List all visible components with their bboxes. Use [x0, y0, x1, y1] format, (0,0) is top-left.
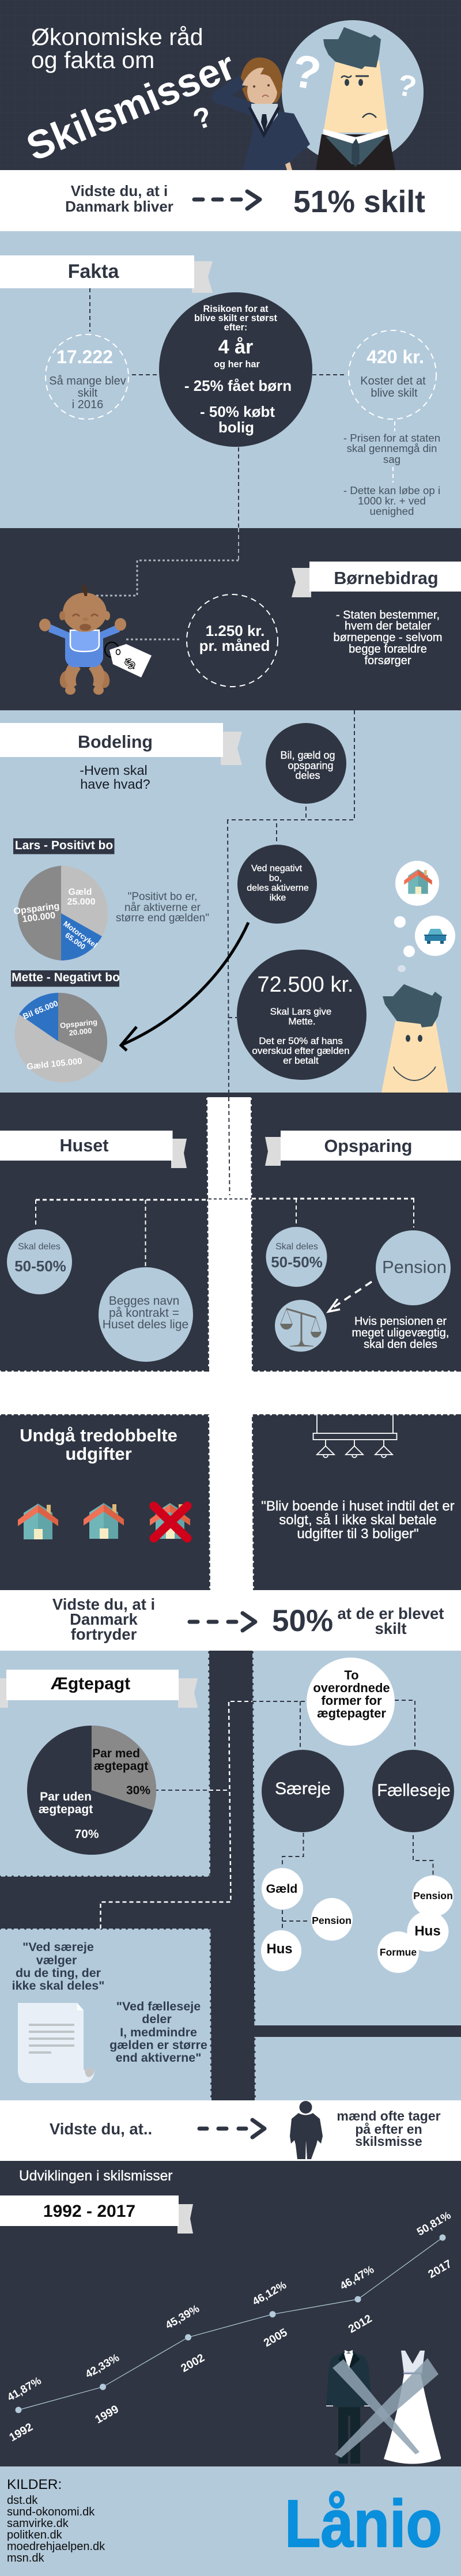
- quote: Særeje: ikke skal deles": [12, 1979, 104, 1993]
- text: price notes: uenighed: [370, 505, 414, 517]
- stat: 420 kr.: [349, 330, 436, 419]
- circle: Pension: Pension: [382, 1257, 447, 1277]
- central circle: risk: Risikoen for at: [203, 304, 269, 314]
- quote: Fælleseje: [109, 1999, 207, 2065]
- circle: Hus right: [407, 1911, 448, 1952]
- circle: 72.500 kr.: er betalt: [283, 1055, 319, 1066]
- panel: Ægtepagt: [0, 1651, 461, 2100]
- quote: Fælleseje: "Ved fælleseje: [116, 1999, 201, 2013]
- icon: question marks: ?: [288, 44, 325, 100]
- line chart: 42,33%: [84, 2352, 122, 2381]
- circle: Skal deles savings: [266, 1227, 327, 1287]
- arrow: dashed white: [328, 1282, 372, 1312]
- line chart: 2002: [179, 2351, 207, 2375]
- pie chart: Lars: 25.000: [67, 897, 96, 907]
- quote: Særeje: du de ting, der: [16, 1966, 101, 1980]
- pie chart: Mette: Opsparing: [59, 1018, 98, 1030]
- source list: politken.dk: [7, 2529, 63, 2541]
- line chart: 46,12%: [251, 2279, 289, 2308]
- circle: Gæld: [262, 1868, 303, 1910]
- text: who pays: hvem der betaler: [345, 620, 431, 632]
- text: subtitle: [80, 763, 150, 792]
- text: price notes: [343, 432, 440, 517]
- circle: 72.500 kr.: 72.500 kr.: [258, 973, 353, 997]
- line chart: [5, 2209, 454, 2444]
- central circle: risk: - 25% fået børn: [184, 377, 292, 394]
- circle: Fælleseje: [372, 1750, 454, 1832]
- central circle: risk: 4 år: [218, 336, 253, 358]
- icon: house: [84, 1503, 124, 1539]
- icon: question marks: ?: [395, 68, 420, 104]
- text: positive estate quote: når aktiverne er: [124, 902, 201, 914]
- circle: Hus: Hus: [267, 1941, 292, 1957]
- heading: Fakta: Fakta: [68, 261, 119, 283]
- pie chart: Ægtepagt: Par uden: [40, 1790, 92, 1803]
- stat: 420 kr.: 420 kr.: [366, 347, 424, 367]
- circle: Skal deles house: [7, 1229, 72, 1294]
- circle: both names on contract: på kontrakt =: [109, 1306, 179, 1320]
- pie chart: Lars: Opsparing: [13, 901, 60, 917]
- banner: 1992 - 2017: 1992 - 2017: [43, 2202, 135, 2221]
- panel: chart trend: [0, 2168, 454, 2464]
- heading: [20, 1425, 177, 1464]
- text: price notes: skal gennemgå din: [347, 442, 437, 454]
- circle: 72.500 kr.: Skal Lars give: [270, 1006, 331, 1017]
- heading: Undgå tredobbelte: [20, 1425, 177, 1445]
- callout: 51% skilt: 51% skilt: [293, 185, 425, 219]
- callout: men gain weight: Vidste du, at..: [50, 2120, 152, 2138]
- circle: 72.500 kr.: Det er 50% af hans: [259, 1035, 343, 1046]
- callout: 51% skilt: Vidste du, at i: [71, 182, 168, 199]
- circle: Gæld: Gæld: [266, 1882, 297, 1896]
- circle: both names on contract: [99, 1267, 193, 1362]
- heading: Ægtepagt: [0, 1670, 198, 1708]
- circle: To overordnede: former for: [321, 1693, 382, 1708]
- icon: house: [18, 1504, 58, 1539]
- line chart: 45,39%: [164, 2303, 202, 2332]
- stat: 1.250 kr.: pr. måned: [199, 637, 270, 654]
- text: pension note: [352, 1315, 449, 1351]
- stat: 1.250 kr.: [187, 594, 278, 687]
- panel: Fakta: [0, 255, 440, 528]
- heading: Ægtepagt: Ægtepagt: [51, 1674, 130, 1693]
- title: Skilsmisser: [20, 43, 241, 170]
- heading: udgifter: [65, 1444, 132, 1464]
- circle: Hus: [261, 1930, 301, 1971]
- banner: 1992 - 2017: [0, 2195, 193, 2234]
- line chart: 2005: [262, 2326, 290, 2349]
- heading: Børnebidrag: [292, 562, 461, 597]
- line chart: 1999: [93, 2402, 121, 2426]
- source list: sund-okonomi.dk: [7, 2506, 95, 2518]
- pie chart: Lars: 65.000: [63, 931, 87, 951]
- label: Mette: Mette - Negativt bo: [12, 971, 120, 984]
- icon: happy man: [381, 984, 448, 1093]
- pie chart: Ægtepagt: [27, 1726, 156, 1855]
- circle: both names on contract: Huset deles lige: [103, 1318, 188, 1331]
- callout: 50% regret: Vidste du, at i: [52, 1595, 155, 1613]
- text: who pays: [334, 609, 442, 667]
- line chart: 2012: [346, 2312, 374, 2336]
- callout: men gain weight: [50, 2101, 441, 2159]
- panel: dark split panels top: [0, 1093, 461, 1372]
- heading: Huset: [0, 1131, 187, 1168]
- central circle: risk: [159, 292, 312, 447]
- icon: suit and dress crossed out: [326, 2350, 441, 2464]
- central circle: risk: blive skilt er størst: [194, 313, 278, 323]
- arrow: [199, 2120, 264, 2137]
- quote: Særeje: [12, 1940, 104, 1993]
- text: pension note: meget uligevægtig,: [352, 1327, 449, 1339]
- line chart: 41,87%: [5, 2375, 44, 2404]
- panel: Børnebidrag: [39, 528, 461, 695]
- pie chart: Ægtepagt: Par med: [92, 1747, 140, 1760]
- heading: KILDER: KILDER:: [7, 2477, 62, 2492]
- pie chart: Mette: Bil 65.000: [21, 999, 59, 1021]
- icon: question marks: ?: [189, 100, 216, 136]
- text: positive estate quote: "Positivt bo er,: [128, 891, 197, 903]
- quote: Fælleseje: gælden er større: [109, 2038, 207, 2052]
- circle: Formue: [377, 1931, 419, 1973]
- pie chart: Mette: [15, 993, 107, 1083]
- quote: [261, 1498, 455, 1542]
- pie chart: Ægtepagt: ægtepagt: [94, 1760, 148, 1773]
- text: who pays: børnepenge - selvom: [334, 631, 442, 644]
- callout: 50% regret: at de er blevet: [338, 1605, 444, 1622]
- heading: Opsparing: Opsparing: [324, 1136, 412, 1156]
- circle: Særeje: Særeje: [275, 1779, 331, 1798]
- line chart: 46,47%: [338, 2264, 376, 2293]
- pie chart: Ægtepagt: 70%: [74, 1828, 99, 1841]
- arrow: [194, 191, 260, 209]
- source list: samvirke.dk: [7, 2517, 69, 2530]
- circle: To overordnede: [307, 1658, 395, 1746]
- circle: shared items: deles: [295, 770, 320, 781]
- circle: negative estate: bo,: [269, 873, 282, 883]
- icon: baby with price tag: [39, 583, 152, 695]
- pie chart: Ægtepagt: 30%: [126, 1784, 150, 1797]
- callout: 50% regret: 50%: [272, 1604, 333, 1638]
- pie chart: Lars: Gæld: [69, 887, 92, 897]
- panel: Bliv boende: [252, 1414, 461, 1590]
- icon: thought bubbles: [394, 861, 455, 972]
- circle: Skal deles savings: 50-50%: [271, 1253, 323, 1271]
- icon: question marks: [189, 44, 420, 136]
- circle: shared items: Bil, gæld og: [280, 750, 335, 761]
- icon: worried woman: [218, 58, 310, 170]
- arrow: [190, 1613, 255, 1630]
- panel: Undgå tredobbelte udgifter: [0, 1414, 210, 1590]
- text: subtitle: have hvad?: [80, 777, 150, 792]
- heading: Børnebidrag: Børnebidrag: [334, 568, 439, 588]
- label: Lars: Lars - Positivt bo: [15, 839, 113, 852]
- text: who pays: forsørger: [364, 654, 411, 667]
- central circle: risk: efter:: [224, 322, 247, 333]
- circle: To overordnede: overordnede: [313, 1681, 390, 1695]
- text: price notes: - Prisen for at staten: [343, 432, 440, 444]
- callout: 50% regret: skilt: [375, 1620, 407, 1637]
- quote: Fælleseje: I, medmindre: [120, 2025, 197, 2039]
- circle: Særeje: [262, 1750, 344, 1832]
- icon: ceiling lamp: [313, 1414, 396, 1458]
- quote: Særeje: "Ved særeje: [22, 1940, 94, 1954]
- icon: baby with price tag: $: [121, 654, 139, 673]
- source list: [7, 2494, 105, 2564]
- icon: scales: [275, 1300, 327, 1351]
- circle: negative estate: ikke: [270, 893, 286, 903]
- stat: 17.222: i 2016: [72, 398, 103, 411]
- quote: Fælleseje: end aktiverne": [116, 2051, 201, 2065]
- circle: negative estate: [237, 845, 317, 924]
- circle: Pension: [311, 1898, 353, 1941]
- line chart: 50,81%: [415, 2209, 453, 2239]
- callout: 50% regret: fortryder: [71, 1625, 137, 1643]
- arrow: curved black: [121, 922, 248, 1050]
- circle: negative estate: deles aktiverne: [247, 883, 309, 893]
- callout: 50% regret: [52, 1595, 444, 1643]
- pie chart: Lars: 100.000: [22, 911, 56, 924]
- circle: both names on contract: Begges navn: [109, 1294, 179, 1308]
- pie chart: Ægtepagt: ægtepagt: [39, 1803, 93, 1816]
- text: pension note: skal den deles: [364, 1338, 437, 1351]
- circle: To overordnede: ægtepagter: [317, 1706, 386, 1720]
- circle: Skal deles house: Skal deles: [18, 1242, 61, 1252]
- circle: negative estate: Ved negativt: [251, 864, 303, 873]
- pie chart: Mette: 20.000: [69, 1026, 92, 1037]
- pie chart: Lars: [13, 866, 108, 961]
- text: price notes: - Dette kan løbe op i: [343, 484, 440, 496]
- panel: Bodeling: [0, 710, 455, 1093]
- text: who pays: begge forældre: [349, 643, 427, 656]
- text: subtitle: -Hvem skal: [80, 763, 148, 778]
- line chart: 1992: [7, 2420, 35, 2444]
- text: price notes: 1000 kr. + ved: [358, 495, 426, 507]
- stat: 17.222: 17.222: [56, 347, 113, 367]
- central circle: risk: - 50% købt: [200, 403, 275, 420]
- stat: 420 kr.: Koster det at: [360, 375, 426, 387]
- title: Økonomiske råd: [31, 24, 203, 50]
- text: positive estate quote: [116, 891, 209, 924]
- central circle: risk: og her har: [214, 359, 260, 370]
- heading: Opsparing: [265, 1131, 461, 1166]
- heading: Bodeling: Bodeling: [78, 732, 153, 752]
- callout: men gain weight: på efter en: [355, 2122, 422, 2137]
- panel: sources: [7, 2477, 442, 2564]
- source list: dst.dk: [7, 2494, 38, 2507]
- circle: shared items: [266, 723, 346, 804]
- line chart: 2017: [426, 2257, 454, 2281]
- text: price notes: sag: [383, 453, 400, 465]
- quote: Særeje: vælger: [36, 1953, 77, 1967]
- circle: Fælleseje: Fælleseje: [377, 1781, 451, 1800]
- heading: Udviklingen: Udviklingen i skilsmisser: [19, 2168, 173, 2184]
- quote: udgifter til 3 boliger": [297, 1526, 419, 1542]
- pie chart: Mette: Gæld 105.000: [27, 1056, 83, 1072]
- heading: Bodeling: [0, 723, 242, 765]
- stat: 1.250 kr.: 1.250 kr.: [206, 622, 264, 639]
- callout: men gain weight: mænd ofte tager: [337, 2108, 441, 2123]
- circle: Formue: Formue: [380, 1946, 417, 1958]
- circle: Hus right: Hus: [414, 1923, 441, 1939]
- icon: person: [290, 2101, 323, 2159]
- icon: crossed house: [150, 1503, 190, 1539]
- text: positive estate quote: større end gælden": [116, 912, 209, 924]
- callout: 50% regret: Danmark: [70, 1610, 138, 1628]
- title: og fakta om: [31, 47, 154, 73]
- stat: 17.222: [46, 334, 129, 419]
- logo: Lånio: Lånio: [285, 2486, 442, 2561]
- circle: 72.500 kr.: [237, 950, 366, 1080]
- circle: Skal deles savings: Skal deles: [275, 1242, 318, 1252]
- stat: 420 kr.: blive skilt: [371, 387, 418, 400]
- central circle: risk: bolig: [218, 419, 254, 436]
- circle: 72.500 kr.: overskud efter gælden: [252, 1045, 350, 1056]
- heading: Fakta: [0, 255, 213, 293]
- header panel: [0, 0, 461, 170]
- callout: men gain weight: skilsmisse: [355, 2134, 422, 2149]
- text: pension note: Hvis pensionen er: [354, 1315, 447, 1328]
- source list: moedrehjaelpen.dk: [7, 2540, 105, 2553]
- circle: 72.500 kr.: Mette.: [288, 1016, 316, 1027]
- stat: 17.222: skilt: [78, 387, 98, 400]
- source list: msn.dk: [7, 2552, 44, 2564]
- heading: Huset: Huset: [60, 1136, 108, 1155]
- circle: Pension right: Pension: [413, 1890, 453, 1901]
- quote: solgt, så I ikke skal betale: [279, 1512, 437, 1528]
- circle: shared items: opsparing: [288, 760, 334, 771]
- stat: 17.222: Så mange blev: [49, 375, 126, 387]
- quote: Fælleseje: deler: [142, 2012, 172, 2026]
- quote: "Bliv boende i huset indtil det er: [261, 1498, 455, 1514]
- circle: Pension: [376, 1230, 451, 1305]
- pie chart: Lars: Motorcykel: [62, 919, 99, 950]
- circle: Skal deles house: 50-50%: [14, 1257, 66, 1275]
- callout: 51% skilt: Danmark bliver: [65, 198, 173, 215]
- circle: Pension right: [412, 1875, 454, 1917]
- icon: thinking man in bubble: [282, 20, 424, 170]
- callout: 51% skilt: [65, 182, 425, 219]
- text: who pays: - Staten bestemmer,: [336, 609, 440, 622]
- circle: To overordnede: To: [344, 1668, 359, 1682]
- icon: document: [18, 2003, 95, 2083]
- circle: Pension: Pension: [312, 1915, 352, 1926]
